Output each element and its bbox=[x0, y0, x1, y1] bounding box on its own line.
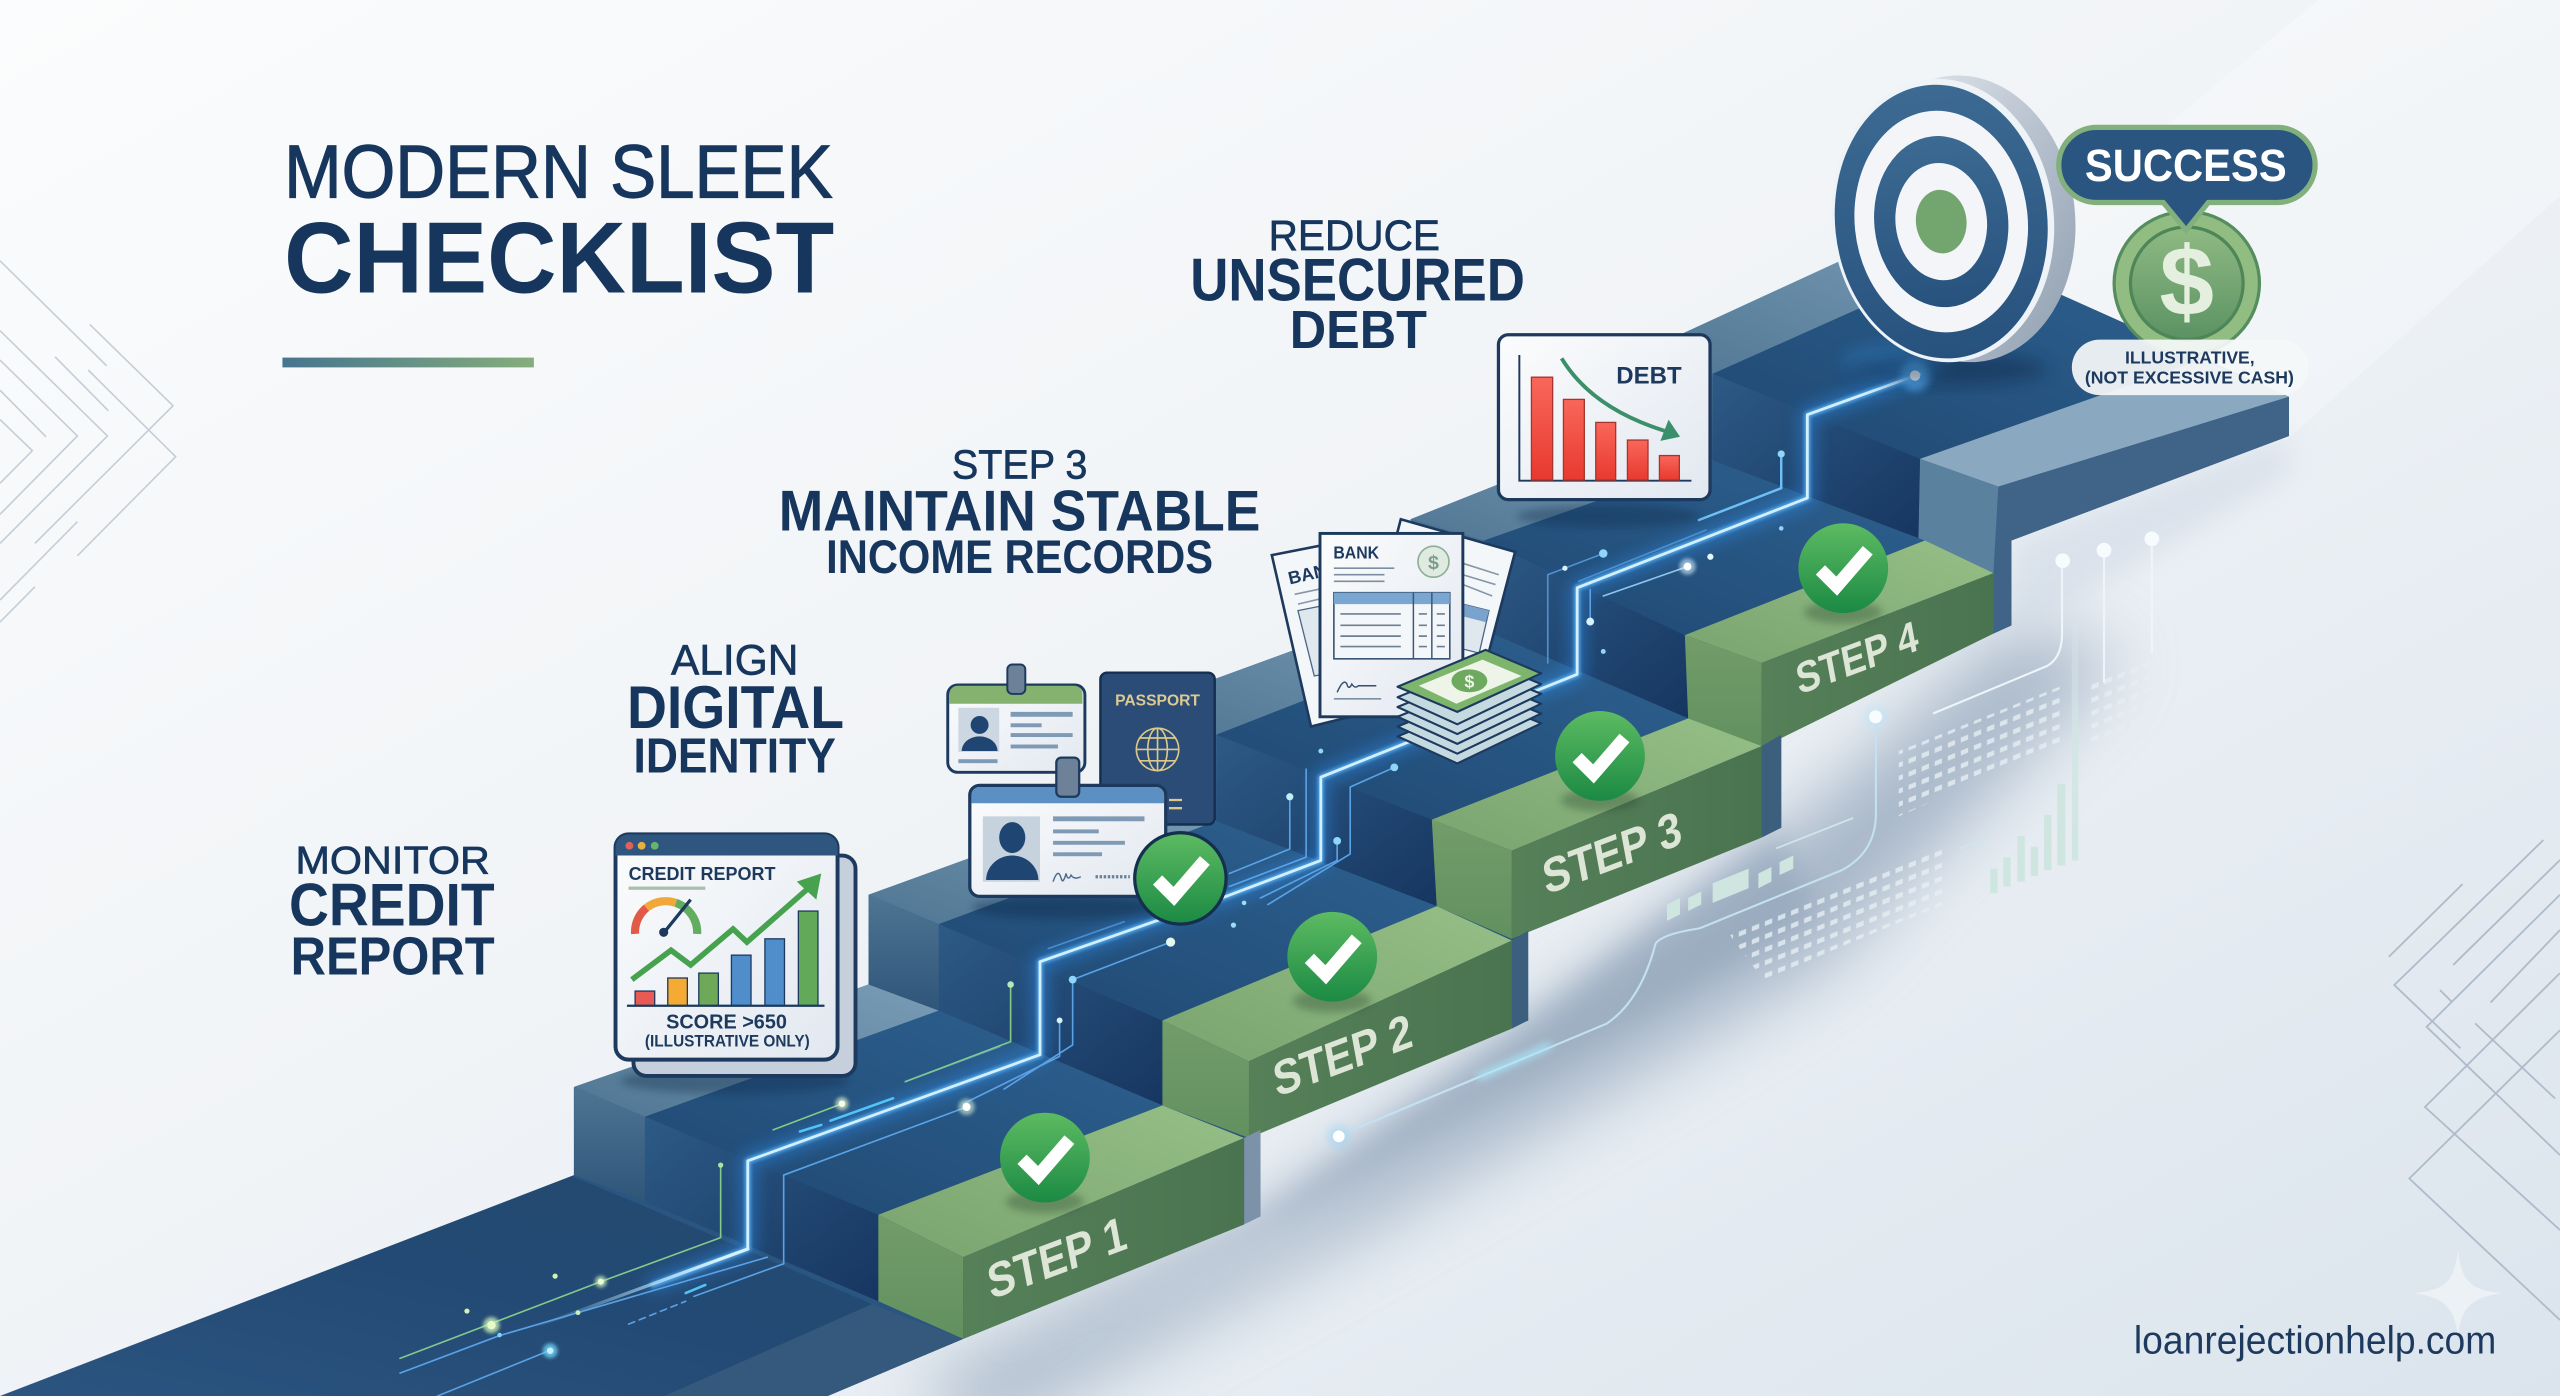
illustrative note: ILLUSTRATIVE, bbox=[2125, 347, 2255, 367]
bank document centre bbox=[1320, 533, 1463, 717]
light nodes bbox=[464, 361, 1930, 1358]
icon: credit report card: CREDIT REPORT bbox=[629, 863, 776, 884]
title bbox=[284, 130, 834, 314]
step labels: STEP 1 bbox=[983, 1207, 1131, 1311]
success bubble bbox=[2059, 127, 2315, 230]
title: MODERN SLEEK bbox=[284, 130, 833, 214]
ID card front bbox=[970, 758, 1166, 896]
footer url: loanrejectionhelp.com bbox=[2134, 1320, 2496, 1363]
illustrative note bbox=[2072, 340, 2309, 395]
icon: credit report card bbox=[616, 834, 856, 1094]
bank document centre: $ bbox=[1428, 552, 1439, 574]
heading: step 3 maintain stable income records: MAINTAIN STABLE bbox=[779, 480, 1260, 544]
icon: ID cards and passport bbox=[948, 665, 1215, 919]
bank document left: BANK bbox=[1286, 557, 1341, 588]
check: step 3 bbox=[1555, 711, 1645, 811]
step labels: STEP 3 bbox=[1538, 802, 1686, 906]
icon: credit report card: SCORE >650 bbox=[666, 1012, 787, 1034]
decoration: right chevron lines bbox=[2389, 840, 2560, 1320]
step labels: STEP 4 bbox=[1792, 612, 1922, 705]
step 4 block bbox=[1685, 540, 2011, 748]
bank document left bbox=[1272, 539, 1396, 727]
check: ID card bbox=[1135, 833, 1226, 924]
coin: $ bbox=[2160, 226, 2214, 336]
glowing circuit path bbox=[400, 346, 1946, 1396]
heading: align digital identity: DIGITAL bbox=[627, 673, 844, 741]
thin blue circuit traces bbox=[400, 454, 1781, 1396]
heading: reduce unsecured debt bbox=[1190, 212, 1525, 360]
heading: step 3 maintain stable income records: STEP 3 bbox=[952, 441, 1087, 487]
cash stack: $ bbox=[1464, 671, 1474, 691]
icon: debt chart bbox=[1498, 335, 1710, 527]
step labels: STEP 2 bbox=[1269, 1004, 1416, 1108]
step 1 block bbox=[878, 1105, 1260, 1339]
passport bbox=[1100, 673, 1215, 825]
sparkle bbox=[2415, 1251, 2501, 1336]
icon: bank statements and cash bbox=[1272, 519, 1541, 763]
check: step 2 bbox=[1287, 912, 1377, 1012]
check: step 4 bbox=[1798, 523, 1888, 624]
tier 2 bbox=[869, 795, 1437, 1105]
success bubble: SUCCESS bbox=[2085, 140, 2287, 191]
check: step 1 bbox=[1000, 1113, 1090, 1213]
heading: monitor credit report bbox=[289, 840, 495, 987]
target bbox=[1818, 64, 2090, 385]
heading: monitor credit report: REPORT bbox=[291, 927, 495, 987]
title: CHECKLIST bbox=[284, 201, 834, 314]
heading: reduce unsecured debt: DEBT bbox=[1290, 300, 1427, 360]
green circuit traces bbox=[400, 985, 1011, 1358]
check badges bbox=[1000, 523, 1888, 1213]
heading: monitor credit report: MONITOR bbox=[296, 840, 490, 883]
heading: step 3 maintain stable income records bbox=[779, 441, 1260, 584]
icon: credit report card: (ILLUSTRATIVE ONLY) bbox=[645, 1033, 810, 1051]
heading: monitor credit report: CREDIT bbox=[289, 871, 495, 939]
tier 3 bbox=[1143, 607, 1688, 906]
heading: step 3 maintain stable income records: INCOME RECORDS bbox=[826, 531, 1213, 584]
data decoration: digital pattern and circuit lines bbox=[1327, 531, 2159, 1148]
shadow under staircase bbox=[914, 436, 2289, 1396]
staircase bbox=[0, 229, 2289, 1396]
icon: debt chart: DEBT bbox=[1616, 364, 1682, 390]
cash stack bbox=[1398, 650, 1541, 763]
ground strip bbox=[0, 1175, 963, 1396]
illustrative note: (NOT EXCESSIVE CASH) bbox=[2085, 368, 2294, 388]
decoration: left chevron lines bbox=[0, 261, 176, 622]
heading: align digital identity: IDENTITY bbox=[633, 729, 836, 783]
passport: PASSPORT bbox=[1115, 692, 1200, 709]
tier 4 bbox=[1411, 428, 1925, 718]
step 3 block bbox=[1432, 718, 1781, 939]
title rule bbox=[282, 358, 534, 367]
step labels bbox=[983, 612, 1922, 1311]
cyan dashes bbox=[686, 1098, 893, 1293]
heading: align digital identity: ALIGN bbox=[671, 636, 798, 683]
heading: align digital identity bbox=[627, 636, 844, 783]
coin bbox=[2114, 211, 2259, 355]
top platform bbox=[1641, 229, 2289, 634]
ID card back bbox=[948, 665, 1085, 772]
target glow bbox=[1842, 346, 1946, 379]
heading: reduce unsecured debt: UNSECURED bbox=[1190, 245, 1525, 313]
heading: reduce unsecured debt: REDUCE bbox=[1269, 212, 1440, 259]
tier 1 bbox=[574, 985, 1162, 1301]
bank document centre: BANK bbox=[1333, 542, 1379, 562]
step 2 block bbox=[1162, 906, 1528, 1138]
bank document right bbox=[1355, 519, 1515, 727]
